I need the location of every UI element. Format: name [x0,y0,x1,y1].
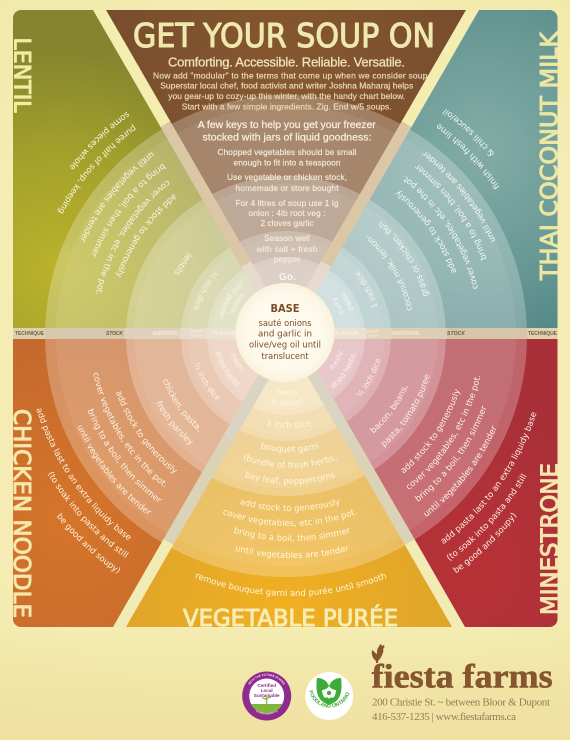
band labels right: VEG [369,334,378,338]
badge: foodland ontario [305,672,354,720]
keys list: onion : 4lb root veg : [248,208,326,218]
base text: translucent [262,352,309,362]
chicken noodle instructions: add stock to generously [116,391,178,474]
minestrone instructions: pasta, tomato puree [378,371,438,453]
keys list: Season well [264,233,310,243]
minestrone instructions: bring to a boil, then simmer [412,402,497,509]
keys list: enough to fit into a teaspoon [234,158,341,168]
vegetable puree instructions: 1 inch dice [267,420,312,428]
keys heading: A few keys to help you get your freezer [198,119,376,131]
keys list: with salt + fresh [256,244,318,254]
vegetable puree instructions [196,388,386,598]
wedge: lentil [13,10,256,328]
band labels right: STOCK [447,331,465,337]
keys heading [198,119,376,144]
lentil instructions: cover vegetables, etc in the pot. [96,180,170,294]
vegetable puree instructions: bay leaf, peppercorns [245,471,335,486]
ring: additions [126,176,446,496]
band labels left: ADDITIONS [152,331,179,337]
wedge: top brown [106,10,466,288]
minestrone instructions: cover vegetables, etc in the pot. [402,371,494,499]
chicken noodle instructions: be good and soupy) [56,512,120,574]
badge: certified local sustainable: Sustainable [254,693,280,698]
band labels left: FLAVOUR [213,331,237,337]
vegetable puree instructions: bring to a boil, then simmer [233,526,352,544]
intro paragraph: Start with a few simple ingredients. Zig. End w/5 soups. [182,102,392,112]
wedge: minestrone [317,339,558,627]
badge: foodland ontario: FOODLAND ONTARIO [307,690,352,710]
contact: 416-537-1235 | www.fiestafarms.ca [372,711,516,723]
band: technique axis [13,328,558,339]
vegetable puree instructions: & spices [272,398,303,406]
minestrone instructions [330,350,536,573]
coconut instructions: bring to a boil, then simmer [415,165,486,260]
coconut instructions: coconut milk, lemon- [366,236,412,310]
intro paragraph: Now add "modular" to the terms that come up when we consider soup. [153,70,430,80]
keys list: pepper [274,254,301,264]
base text: sauté onions [258,318,312,329]
band labels left: STOCK [106,331,123,337]
lentil instructions: chili powder [219,282,243,320]
coconut instructions: & chili sauce/oil [442,109,494,156]
badge: certified local sustainable: Local [261,688,273,693]
wedge: chicken noodle [13,339,258,627]
wedge: vegetable puree [126,376,452,627]
chicken noodle instructions [36,352,245,574]
coconut instructions: curry [332,298,344,314]
vegetable puree instructions: cover vegetables, etc in the pot. [221,507,359,529]
lentil instructions: ½ inch dice [194,272,218,310]
minestrone instructions: until vegetables are tender [420,422,506,524]
intro paragraph: you gear-up to cozy-up this winter, with the handy chart below. [168,91,405,101]
coconut instructions: add stock to generously [395,190,456,273]
vegetable puree instructions: (bundle of fresh herbs, [244,454,336,468]
base text: and garlic in [258,330,312,340]
side title: chicken noodle: CHICKEN NOODLE [8,409,34,618]
base text: olive/veg oil until [249,340,321,350]
keys heading: stocked with jars of liquid goodness: [202,132,372,144]
chicken noodle instructions: bring to a boil, then simmer [88,408,162,502]
band labels right [335,330,558,338]
band labels right: ADDITIONS [392,331,420,337]
minestrone instructions: (to soak into pasta and still [444,471,534,567]
ring: root veg [181,231,391,441]
band labels right: FLAVOUR [335,331,358,337]
address: 200 Christie St. ~ between Bloor & Dupont [372,696,550,708]
keys list [218,147,357,264]
keys list: homemade or store bought [236,183,339,193]
minestrone instructions: dried herbs [327,350,360,392]
band labels left: ROOT [191,330,205,334]
vegetable puree instructions: remove bouquet garni and purée until smooth [194,571,388,599]
minestrone instructions: add stock to generously [397,386,469,480]
side title: minestrone: MINESTRONE [538,463,564,615]
side title: thai coconut milk: THAI COCONUT MILK [537,31,563,281]
ring: flavour [207,257,365,415]
keys list: For 4 litres of soup use 1 lg [236,198,339,208]
coconut instructions: grass or chicken, fish [379,221,430,296]
chicken noodle instructions: until vegetables are tender [78,425,152,514]
logo: rooster [372,644,384,663]
base text [249,303,321,362]
lentil instructions: puree half of soup, keeping [58,124,136,214]
lentil instructions: some pieces whole [70,112,129,170]
lentil instructions: lentils [174,253,193,276]
ring: stock [45,95,527,577]
chicken noodle instructions: chicken, pasta, [163,379,199,432]
minestrone instructions: be good and soupy) [451,510,521,578]
lentil instructions: bring to a boil, then simmer [92,164,166,258]
minestrone instructions: add pasta last to an extra liquidy base [437,408,550,554]
vegetable puree instructions: bouquet garni [261,442,319,454]
badge: certified local sustainable [242,672,292,720]
intro paragraph [153,70,430,112]
minestrone instructions: ½ inch dice [354,355,385,400]
coconut instructions: paste [341,292,354,310]
coconut instructions: 1 inch dice [356,272,378,308]
badge: certified local sustainable: WITH THE FUTURE IN MIND [247,673,287,686]
band labels left [15,330,237,338]
minestrone instructions: fresh/ [327,348,346,372]
keys list: Chopped vegetables should be small [218,147,357,157]
vegetable puree instructions: herbs [277,388,298,395]
wedge: thai coconut milk [316,10,558,328]
badge: certified local sustainable: localflavourplus.ca [255,709,279,716]
coconut instructions: until vegetables are tender [422,152,495,242]
band labels right: TECHNIQUE [528,331,558,337]
chicken noodle instructions: fresh/ [230,354,245,372]
band labels left: TECHNIQUE [15,331,45,337]
lentil instructions: cumin, [229,294,244,314]
chicken noodle instructions: ½ inch dice [194,362,220,400]
lentil instructions: add stock to generously [116,194,176,278]
chicken noodle instructions: fresh parsley [156,401,194,445]
go label: Go. [279,272,296,283]
logo: fiesta farms: fiesta farms [372,658,553,696]
coconut instructions [332,109,500,314]
chicken noodle instructions: (to soak into pasta and still [48,472,129,558]
keys list: Use vegetable or chicken stock, [227,172,347,182]
coconut instructions: finish with fresh lime [437,124,500,190]
vegetable puree instructions: until vegetables are tender [234,544,350,561]
vegetable puree instructions: add stock to generously [240,499,339,513]
lentil instructions [58,112,244,320]
chicken noodle instructions: add pasta last to an extra liquidy base [36,408,130,540]
background: footer shading [0,625,570,740]
keys list: 2 cloves garlic [260,218,314,228]
title: GET YOUR SOUP ON [133,16,435,55]
minestrone instructions: bacon, beans, [367,381,414,438]
side title: lentil: LENTIL [8,38,34,113]
coconut instructions: cover vegetables, etc in the pot. [404,176,478,289]
chicken noodle instructions: cover vegetables, etc in the pot. [94,372,166,488]
bottom title: vegetable puree: VEGETABLE PURÉE [183,604,398,632]
band labels right: ROOT [367,330,381,334]
chicken noodle instructions: dried herbs [216,352,240,386]
band labels left: VEG [193,334,202,338]
lentil instructions: until vegetables are tender [80,152,154,242]
base text: BASE [270,303,300,315]
center circle: base [236,283,334,382]
subtitle: Comforting. Accessible. Reliable. Versatile. [168,54,405,70]
badge: certified local sustainable: Certified [257,683,276,688]
separators: cream stripes [88,0,484,647]
intro paragraph: Superstar local chef, food activist and writer Joshna Maharaj helps [160,80,413,90]
